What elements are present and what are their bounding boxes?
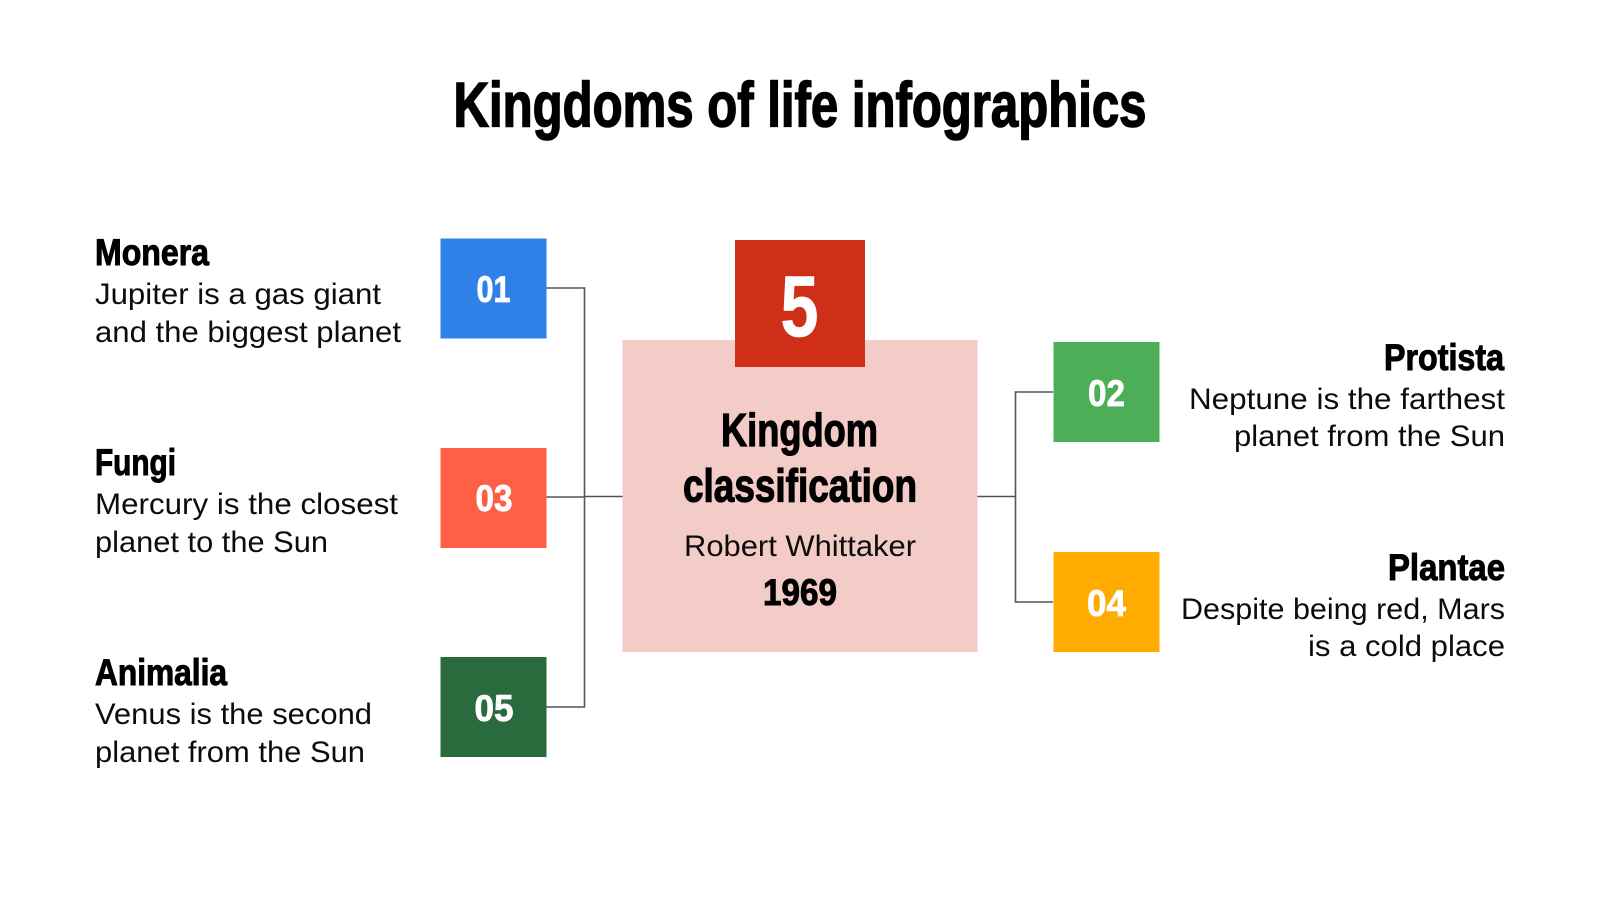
year: 1969 [763, 572, 837, 613]
text: Fungi [95, 442, 398, 559]
box 03: 03 [476, 478, 512, 519]
text: Plantae: Plantae [1388, 547, 1505, 588]
box 03 [440, 448, 546, 548]
text: Animalia: Venus is the second [95, 698, 372, 731]
center heading [683, 404, 917, 512]
badge: 5: 5 [780, 259, 818, 355]
text: Protista [1189, 337, 1505, 453]
text: Plantae: is a cold place [1308, 630, 1505, 663]
box 01 [440, 238, 546, 338]
box 05: 05 [474, 688, 514, 729]
item 03: Fungi [95, 442, 546, 559]
panel: center kingdom classification [622, 240, 978, 652]
text: Fungi: Mercury is the closest [95, 488, 398, 521]
item 05: Animalia [95, 652, 546, 769]
box 01: 01 [476, 269, 510, 310]
text: Plantae: Despite being red, Mars [1181, 593, 1505, 626]
item 04: Plantae [1054, 547, 1505, 663]
text: Monera: Monera [95, 232, 209, 273]
text: Fungi: Fungi [95, 442, 176, 483]
text: Monera [95, 232, 401, 349]
box 05 [440, 657, 546, 757]
item 02: Protista [1054, 337, 1505, 453]
text: Plantae [1181, 547, 1505, 663]
title: Kingdoms of life infographics [454, 70, 1146, 140]
text: Monera: and the biggest planet [95, 316, 401, 349]
text: Protista: Neptune is the farthest [1189, 383, 1505, 416]
text: Animalia: Animalia [95, 652, 227, 693]
badge: 5 [735, 240, 865, 367]
box 04 [1054, 552, 1160, 652]
box 04: 04 [1087, 583, 1126, 624]
box 02 [1054, 342, 1160, 442]
center heading: classification [683, 460, 917, 512]
text: Monera: Jupiter is a gas giant [95, 278, 381, 311]
text: Animalia: planet from the Sun [95, 736, 365, 769]
item 01: Monera [95, 232, 546, 349]
text: Fungi: planet to the Sun [95, 526, 328, 559]
text: Protista: planet from the Sun [1234, 420, 1505, 453]
connector lines [546, 288, 1053, 707]
text: Animalia [95, 652, 372, 769]
box 02: 02 [1088, 373, 1125, 414]
text: Protista: Protista [1384, 337, 1504, 378]
author: Robert Whittaker [684, 530, 916, 563]
center heading: Kingdom [721, 404, 878, 456]
